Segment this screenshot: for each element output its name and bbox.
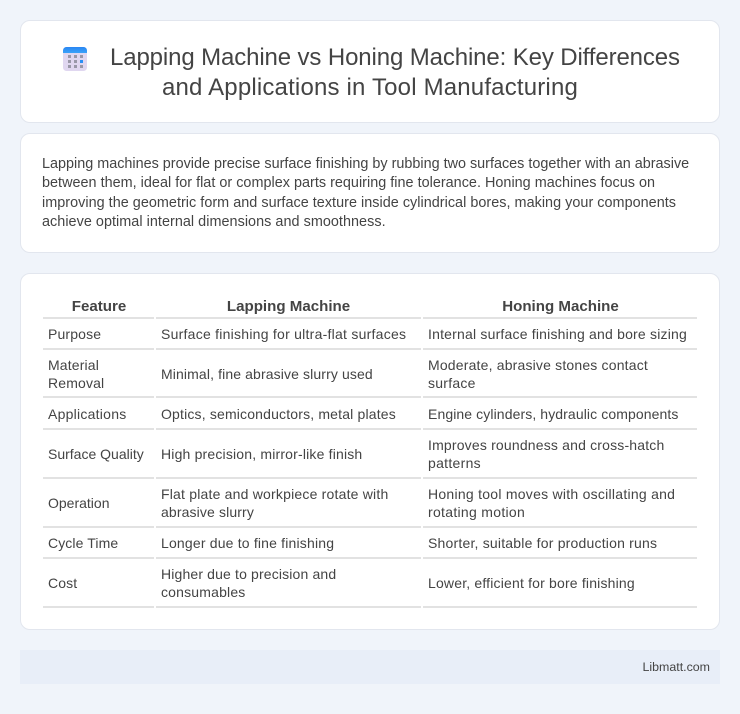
row: Surface Quality: patterns: [428, 455, 481, 471]
row: Cost: [43, 566, 697, 608]
row: Operation: [43, 486, 697, 528]
row: Cycle Time: Shorter, suitable for production runs: [428, 535, 657, 551]
row: Operation: abrasive slurry: [161, 504, 254, 520]
title: Lapping Machine vs Honing Machine: Key Differences: [110, 44, 680, 71]
row: Cycle Time: Longer due to fine finishing: [161, 535, 334, 551]
table: [43, 298, 697, 608]
row: Cost: Cost: [48, 575, 77, 591]
footer bar: [20, 650, 720, 684]
row: Material Removal: Minimal, fine abrasive slurry used: [161, 366, 373, 382]
row: Operation: Honing tool moves with oscillating and: [428, 486, 675, 502]
title: [110, 44, 680, 101]
row: Material Removal: Material: [48, 357, 99, 373]
row: Operation: Flat plate and workpiece rotate with: [161, 486, 388, 502]
row: Purpose: Purpose: [48, 326, 101, 342]
title card: [20, 20, 720, 123]
row: Purpose: Internal surface finishing and bore sizing: [428, 326, 687, 342]
row: Cost: Lower, efficient for bore finishing: [428, 575, 635, 591]
intro text: Lapping machines provide precise surface finishing by rubbing two surfaces together with an abrasive: [42, 156, 689, 172]
title: and Applications in Tool Manufacturing: [162, 74, 578, 101]
row: Operation: Operation: [48, 495, 109, 511]
intro text: [42, 156, 689, 230]
intro text: improving the geometric form and surface texture inside cylindrical bores, making your components: [42, 195, 676, 211]
intro card: [20, 133, 720, 253]
row: Applications: Engine cylinders, hydraulic components: [428, 406, 678, 422]
icon: calendar: [63, 47, 87, 71]
row: Surface Quality: Improves roundness and cross-hatch: [428, 437, 664, 453]
row: Applications: Optics, semiconductors, metal plates: [161, 406, 396, 422]
row: Applications: Applications: [48, 406, 126, 422]
intro text: achieve optimal internal dimensions and smoothness.: [42, 214, 386, 230]
row: Material Removal: [43, 357, 697, 398]
row: Surface Quality: [43, 437, 697, 479]
row: Material Removal: Removal: [48, 375, 104, 391]
footer text: Libmatt.com: Libmatt.com: [643, 660, 710, 674]
row: Cost: Higher due to precision and: [161, 566, 336, 582]
table header row: Honing Machine: [502, 298, 619, 315]
table header row: Feature: [72, 298, 126, 315]
row: Purpose: [43, 326, 697, 350]
comparison table card: [20, 273, 720, 630]
row: Material Removal: Moderate, abrasive stones contact: [428, 357, 648, 373]
row: Surface Quality: High precision, mirror-like finish: [161, 446, 362, 462]
row: Material Removal: surface: [428, 375, 476, 391]
row: Surface Quality: Surface Quality: [48, 446, 144, 462]
intro text: between them, ideal for flat or complex parts requiring fine tolerance. Honing machines focus on: [42, 175, 655, 191]
row: Cycle Time: [43, 535, 697, 559]
row: Cost: consumables: [161, 584, 245, 600]
row: Purpose: Surface finishing for ultra-flat surfaces: [161, 326, 406, 342]
row: Applications: [43, 406, 697, 430]
row: Cycle Time: Cycle Time: [48, 535, 118, 551]
row: Operation: rotating motion: [428, 504, 525, 520]
table header row: Lapping Machine: [227, 298, 350, 315]
table header row: [43, 298, 697, 319]
